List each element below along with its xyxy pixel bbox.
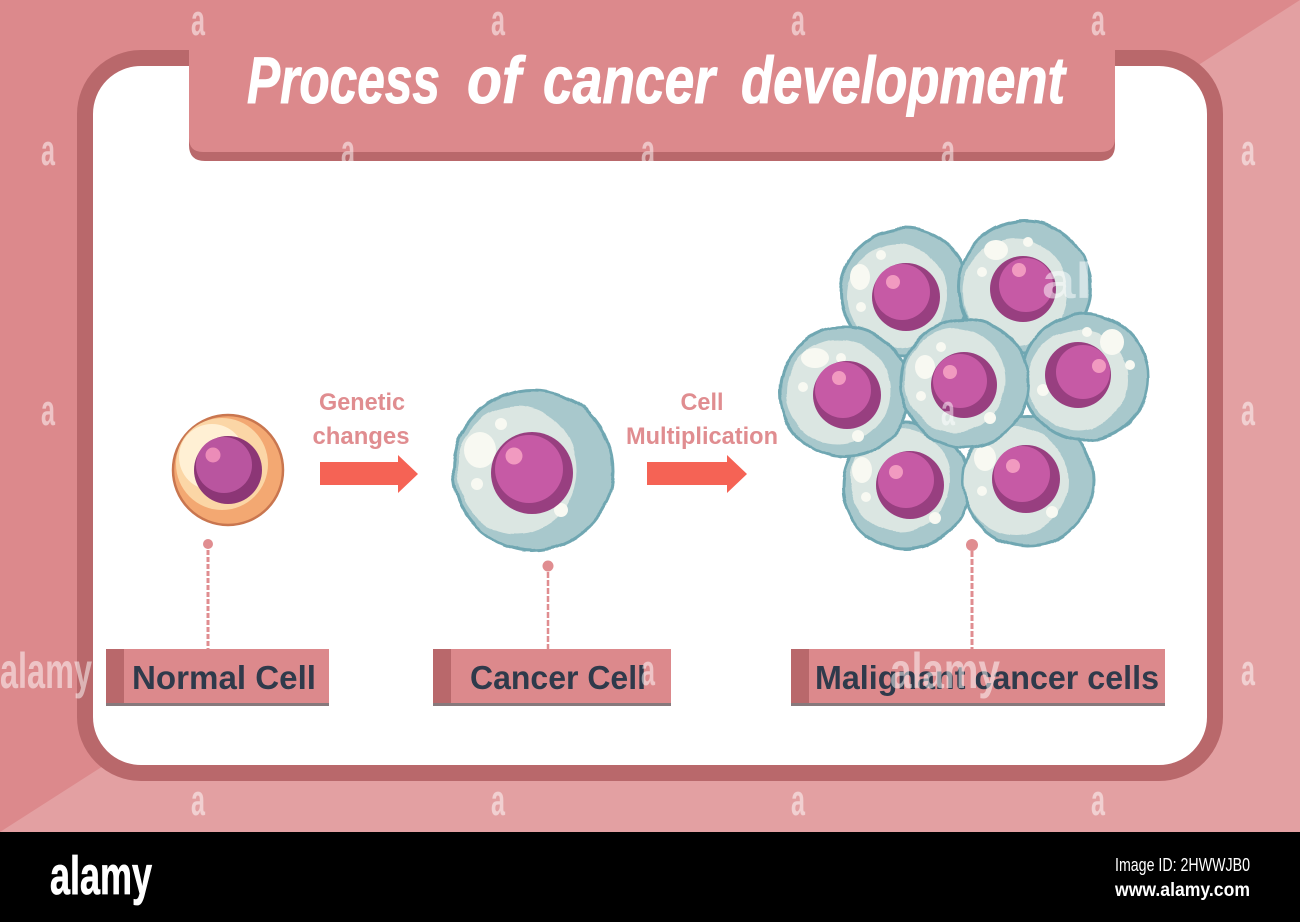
connector: cancer cell	[542, 560, 554, 649]
image id: Image ID: 2HWWJB0	[1115, 855, 1250, 875]
watermark: a	[41, 126, 55, 175]
watermark: a	[491, 776, 505, 825]
cell: top right	[959, 221, 1091, 353]
watermark: a	[1091, 776, 1105, 825]
text: genetic changes: changes	[312, 423, 410, 450]
text: cell multiplication: Multiplication	[626, 423, 778, 450]
watermark: a	[1241, 386, 1255, 435]
watermark: a	[41, 386, 55, 435]
cell: left	[780, 327, 910, 457]
cell: right	[1022, 314, 1148, 440]
text: cell multiplication: Cell	[680, 389, 724, 416]
arrow: cell multiplication	[647, 455, 747, 493]
website: www.alamy.com	[1114, 880, 1250, 901]
icon: cancer cell	[453, 390, 613, 550]
text: cell multiplication	[626, 389, 778, 450]
title: cancer	[543, 43, 718, 117]
title: development	[741, 43, 1067, 117]
watermark: a	[941, 386, 955, 435]
title: Process	[247, 43, 440, 117]
cell: bottom left	[843, 423, 969, 549]
cell: bottom right	[963, 416, 1093, 546]
icon: normal cell	[173, 415, 283, 525]
arrow: genetic changes	[320, 455, 418, 493]
title banner	[189, 0, 1115, 161]
label: normal cell	[106, 649, 329, 706]
text: genetic changes	[312, 389, 410, 450]
panel: main white frame	[85, 58, 1215, 773]
cell: center	[901, 319, 1029, 447]
watermark: a	[1241, 126, 1255, 175]
watermark: a	[1241, 646, 1255, 695]
connector: normal cell	[203, 539, 213, 649]
title: of	[467, 43, 526, 117]
connector: malignant cancer cells	[966, 539, 978, 649]
icon: malignant cell cluster	[780, 221, 1148, 549]
watermark: a	[341, 126, 355, 175]
label: malignant cancer cells: Malignant cancer cells	[815, 659, 1159, 696]
label: normal cell: Normal Cell	[132, 659, 316, 696]
watermark: a	[791, 776, 805, 825]
cell: top left	[841, 228, 969, 356]
watermark: a	[941, 126, 955, 175]
watermark: al	[1042, 253, 1092, 309]
watermark: a	[191, 776, 205, 825]
footer bar	[0, 832, 1300, 922]
label: cancer cell: Cancer Cell	[470, 659, 646, 696]
text: genetic changes: Genetic	[319, 389, 405, 416]
watermark: a	[641, 646, 655, 695]
watermark: alamy	[0, 643, 92, 699]
logo: alamy: alamy	[50, 846, 152, 906]
watermark: a	[641, 126, 655, 175]
label: malignant cancer cells	[791, 649, 1165, 706]
label: cancer cell	[433, 649, 671, 706]
watermark: alamy	[890, 643, 1000, 699]
